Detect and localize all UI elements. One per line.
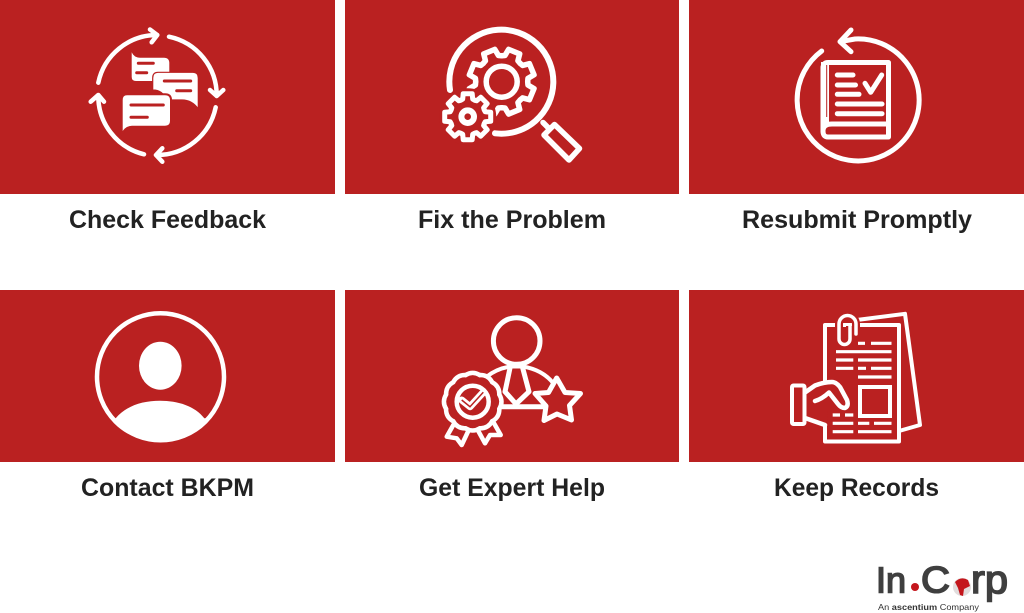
label: Resubmit Promptly: Resubmit Promptly <box>742 206 972 234</box>
panel: Fix the Problem <box>345 0 679 234</box>
icon: magnifier with gears <box>439 30 580 160</box>
label: Contact BKPM: Contact BKPM <box>81 474 254 502</box>
red tile <box>0 0 335 194</box>
globe <box>953 578 971 596</box>
red tile <box>689 0 1024 194</box>
icon: cycle of chat bubbles <box>91 30 223 162</box>
label: Get Expert Help: Get Expert Help <box>419 474 605 502</box>
label: Fix the Problem: Fix the Problem <box>418 206 606 234</box>
tagline: An ascentium Company <box>878 602 980 612</box>
panel: Get Expert Help <box>345 290 679 502</box>
icon: expert with badge and star <box>444 318 580 445</box>
panel: Keep Records <box>689 290 1024 502</box>
logo: InCorp <box>876 558 1008 612</box>
red dot <box>911 583 919 591</box>
wordmark left: In <box>876 560 906 600</box>
icon: person avatar <box>97 313 224 440</box>
label: Keep Records: Keep Records <box>774 474 939 502</box>
red tile <box>345 290 679 462</box>
label: Check Feedback: Check Feedback <box>69 206 266 234</box>
wordmark right: rp <box>971 558 1008 602</box>
icon: documents and hand <box>792 314 920 442</box>
icon: book with return arrow <box>797 30 919 161</box>
red tile <box>0 290 335 462</box>
panel: Resubmit Promptly <box>689 0 1024 234</box>
red tile <box>689 290 1024 462</box>
panel: Contact BKPM <box>0 290 335 502</box>
panel: Check Feedback <box>0 0 335 234</box>
red tile <box>345 0 679 194</box>
letter C: C <box>921 560 950 600</box>
